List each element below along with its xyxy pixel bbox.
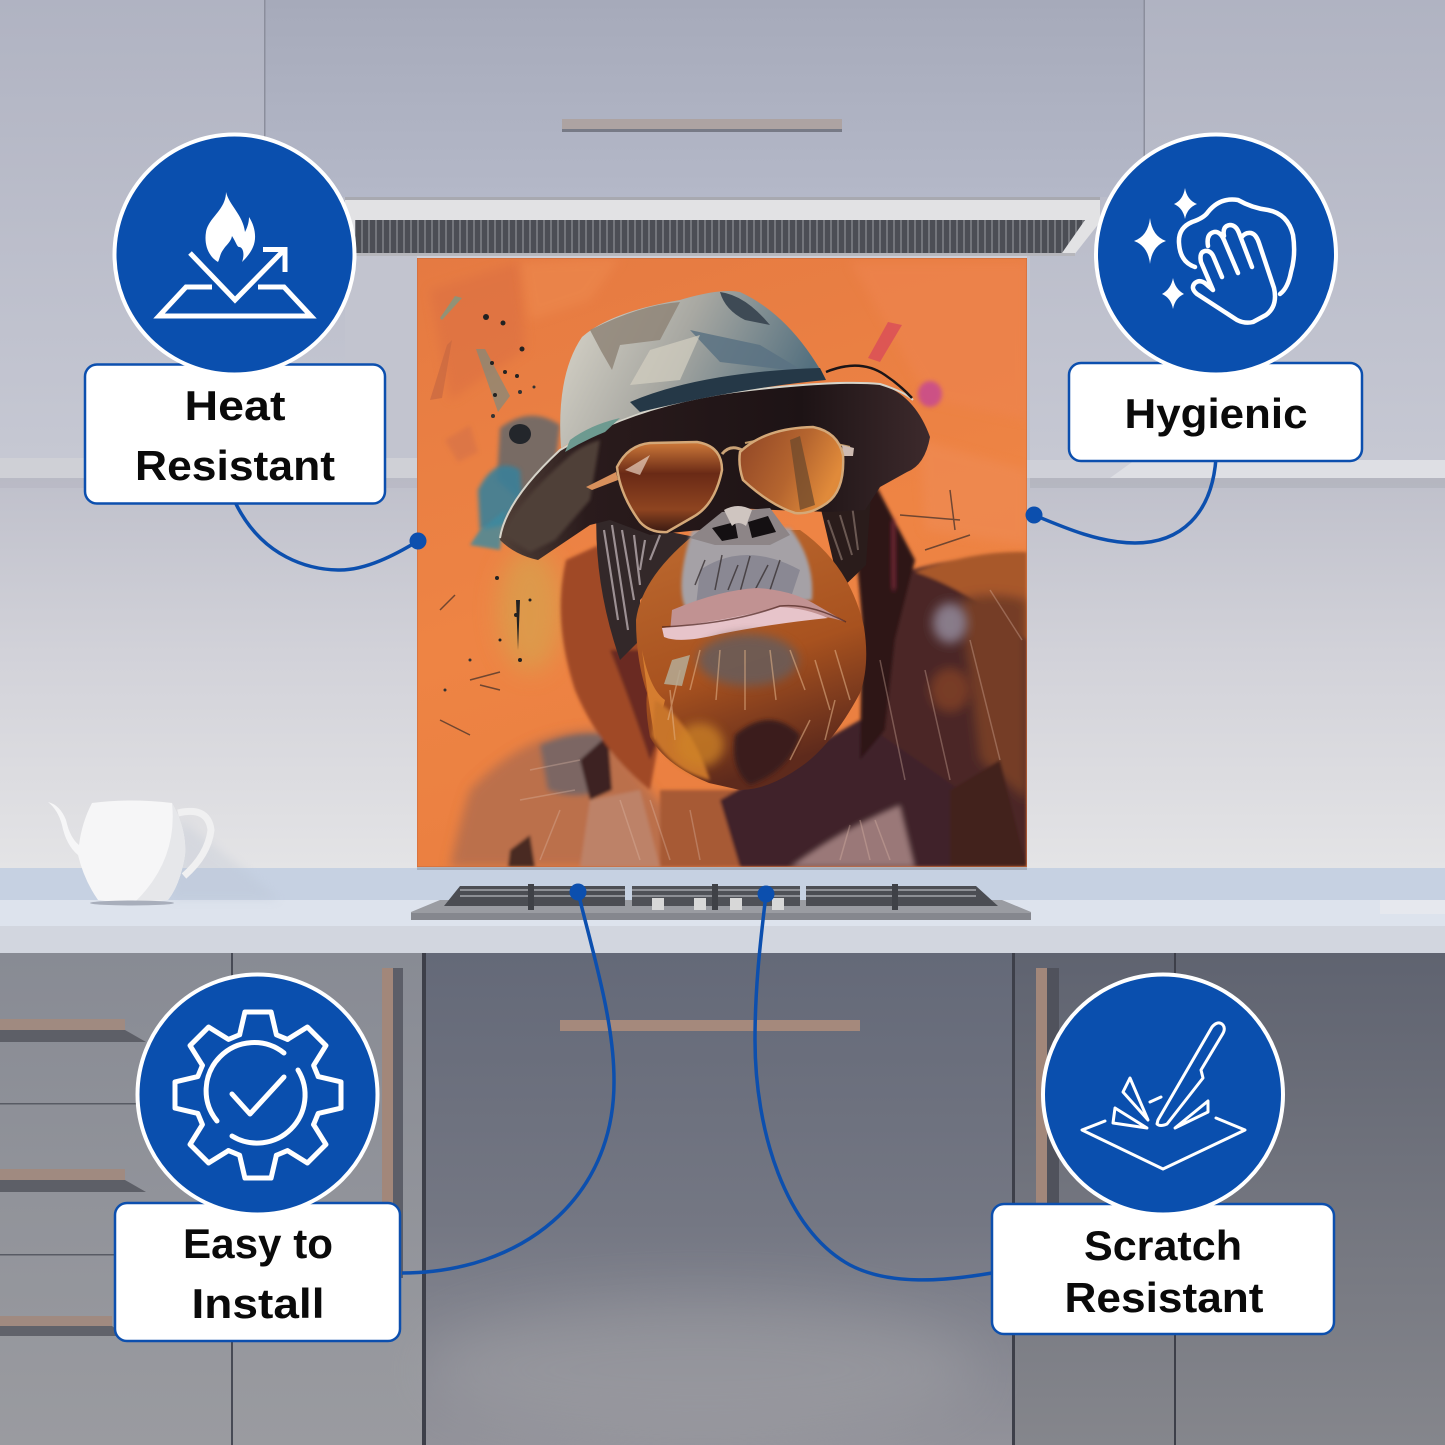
body fur xyxy=(450,470,1027,867)
sunglasses xyxy=(586,427,854,532)
label text: Resistant xyxy=(1064,1274,1264,1321)
chin xyxy=(698,634,798,686)
icon: knife scratching surface xyxy=(1082,1023,1245,1169)
face xyxy=(596,510,866,790)
cooker hood xyxy=(345,197,1100,256)
callout: easy to install xyxy=(115,974,400,1341)
icon: gear with check mark xyxy=(175,1012,341,1178)
cabinet handles xyxy=(0,968,1059,1336)
label text xyxy=(183,1220,333,1327)
icon: flame on surface with deflect arrow xyxy=(159,192,311,316)
label text: Easy to xyxy=(183,1220,333,1267)
callout: hygienic xyxy=(1069,134,1362,461)
orangutan artwork panel xyxy=(417,258,1027,867)
upper cabinets xyxy=(0,0,1445,460)
connector: scratch resistant xyxy=(755,886,992,1280)
label text xyxy=(135,382,335,489)
connector: heat resistant xyxy=(235,502,426,570)
teapot xyxy=(48,800,280,906)
hat brim xyxy=(500,383,930,560)
splashback shadow xyxy=(417,866,1027,870)
callout: heat resistant xyxy=(85,134,385,504)
right dark hair xyxy=(856,488,918,756)
label box xyxy=(992,1204,1334,1334)
nose xyxy=(690,506,790,545)
long left hair xyxy=(561,540,660,790)
connector: hygienic xyxy=(1026,458,1216,543)
top handle xyxy=(562,119,842,132)
hat crown xyxy=(560,291,912,452)
under cabinet lights xyxy=(0,458,1445,488)
dark hollow under chin xyxy=(734,720,800,785)
label text: Resistant xyxy=(135,442,335,489)
fur strokes xyxy=(520,590,1022,860)
label text: Install xyxy=(192,1280,324,1327)
lower cabinets xyxy=(0,953,1445,1445)
callout: scratch resistant xyxy=(992,974,1334,1334)
badge circle xyxy=(1096,134,1336,374)
icon: hand wiping with cloth and sparkles xyxy=(1134,188,1294,323)
label box xyxy=(1069,363,1362,461)
badge circle xyxy=(138,974,378,1214)
muzzle and beard xyxy=(636,530,866,790)
gas hob xyxy=(411,884,1031,920)
label box xyxy=(85,364,385,504)
countertop xyxy=(0,868,1445,953)
badge circle xyxy=(1043,974,1283,1214)
label text xyxy=(1064,1222,1264,1321)
paint splatter xyxy=(440,314,970,735)
label text: Scratch xyxy=(1084,1222,1242,1269)
label box xyxy=(115,1203,400,1341)
mouth and lips xyxy=(670,588,846,627)
badge circle xyxy=(114,134,354,374)
cheek fur xyxy=(596,520,692,660)
connector: easy to install xyxy=(402,884,614,1273)
background brush marks xyxy=(430,258,1027,672)
label text: Hygienic xyxy=(1124,390,1308,437)
label text: Heat xyxy=(184,382,286,429)
